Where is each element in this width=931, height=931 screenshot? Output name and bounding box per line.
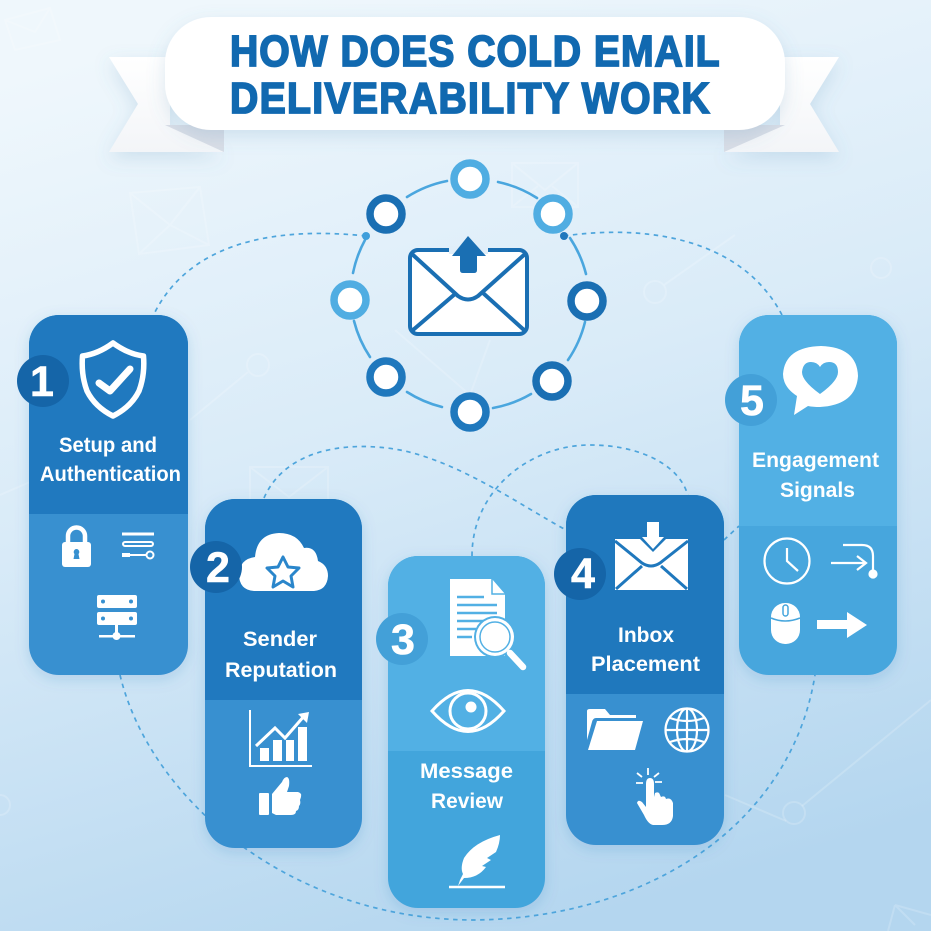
icon: document with magnifier — [450, 579, 523, 667]
panel 3: message review — [376, 556, 545, 908]
icon: clock — [764, 538, 810, 584]
icon: folder — [587, 709, 643, 750]
panel 1: setup and authentication — [17, 315, 188, 675]
badge 3 — [376, 613, 428, 665]
label: sender reputation: Sender — [243, 628, 317, 651]
icon: eye — [432, 690, 504, 732]
label: sender reputation — [225, 628, 337, 682]
title banner — [109, 17, 839, 152]
label: engagement signals — [752, 449, 879, 502]
icon: thumbs up — [259, 777, 301, 815]
ring arcs — [353, 181, 586, 408]
panel 5: engagement signals — [725, 315, 897, 675]
icon: growth chart — [250, 710, 312, 766]
badge 4: 4 — [571, 550, 595, 598]
icon: globe — [666, 708, 708, 752]
icon: shield check — [82, 343, 144, 416]
label: inbox placement — [591, 624, 700, 676]
badge 3: 3 — [391, 616, 415, 664]
icon: cloud with star — [239, 533, 328, 591]
label: engagement signals: Engagement — [752, 449, 879, 472]
panel 2: sender reputation — [190, 499, 362, 848]
icon: feather quill — [449, 835, 505, 887]
ribbon tail left — [109, 57, 224, 152]
label: setup and authentication: Setup and — [59, 434, 157, 457]
ring nodes — [334, 163, 603, 428]
label: setup and authentication: Authentication — [40, 463, 181, 486]
icon: mouse — [771, 603, 800, 644]
icon: settings bars — [122, 534, 154, 558]
icon: inbox envelope — [615, 522, 688, 590]
title text: HOW DOES COLD EMAIL — [230, 27, 720, 75]
label: message review: Message — [420, 760, 513, 783]
badge 1: 1 — [30, 358, 54, 406]
badge 5: 5 — [740, 377, 764, 425]
label: message review — [420, 760, 513, 813]
badge 2: 2 — [206, 544, 230, 592]
icon: routed arrow — [831, 545, 876, 578]
title text — [230, 27, 720, 122]
label: sender reputation: Reputation — [225, 659, 337, 682]
icon: server — [97, 595, 137, 640]
label: engagement signals: Signals — [780, 479, 855, 502]
icon: lock — [62, 528, 91, 567]
icon: speech bubble heart — [783, 346, 858, 415]
icon: pointing hand — [636, 768, 673, 825]
ribbon tail right — [724, 57, 839, 152]
connector: dashed network lines — [120, 232, 815, 920]
label: message review: Review — [431, 790, 504, 813]
central email ring — [334, 163, 603, 428]
title text: DELIVERABILITY WORK — [230, 74, 710, 122]
badge 1 — [17, 355, 69, 407]
icon: right arrow — [817, 612, 867, 638]
icon: envelope with upload arrow — [410, 236, 527, 334]
label: inbox placement: Inbox — [618, 624, 674, 647]
badge 4 — [554, 548, 606, 600]
label: inbox placement: Placement — [591, 653, 700, 676]
label: setup and authentication — [40, 434, 181, 486]
banner pill — [165, 17, 785, 130]
panel 4: inbox placement — [554, 495, 724, 845]
badge 2 — [190, 541, 242, 593]
badge 5 — [725, 374, 777, 426]
